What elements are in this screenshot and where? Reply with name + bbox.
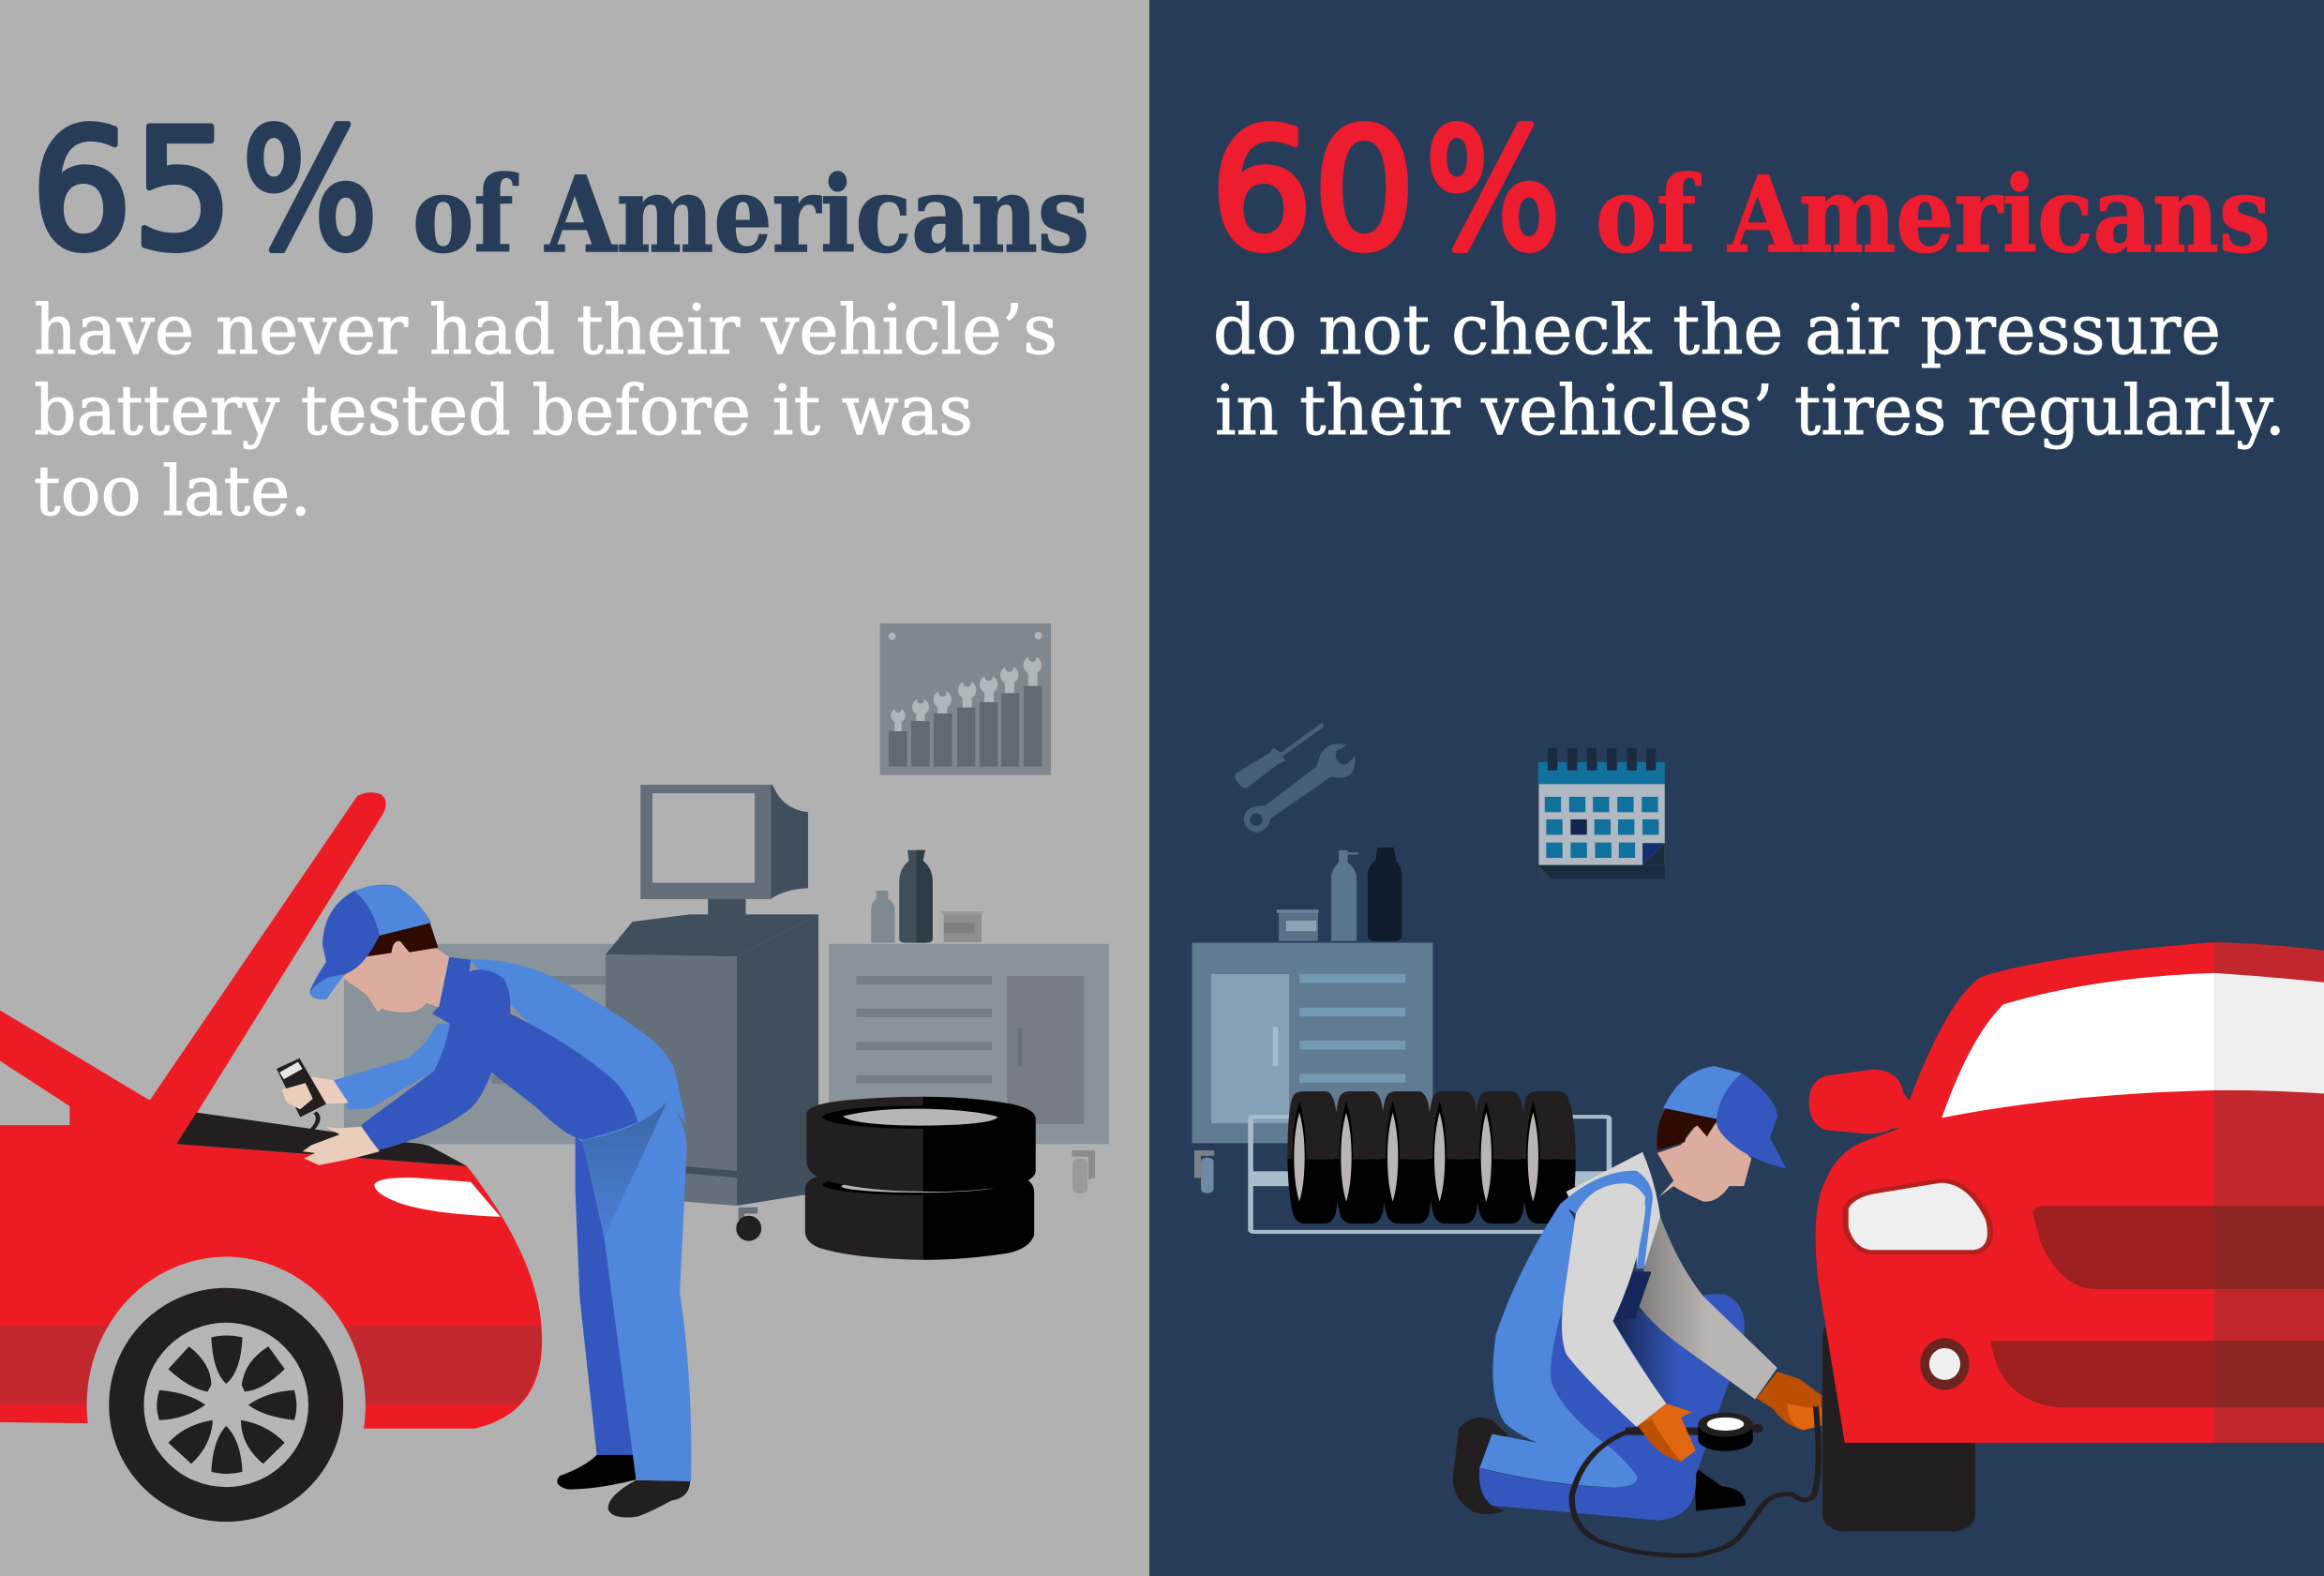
scene: car and kneeling mechanic bbox=[1453, 942, 2324, 1555]
monitor bbox=[640, 785, 808, 920]
right cabinet bbox=[829, 944, 1109, 1193]
panel: battery statistic bbox=[0, 0, 1149, 1576]
text: tire pressure description bbox=[1213, 291, 2286, 451]
text: battery description bbox=[34, 291, 1057, 532]
mechanic leaning over engine bbox=[277, 885, 691, 1518]
scene: car mechanic testing battery bbox=[0, 785, 1109, 1555]
heading: 65% of Americans bbox=[31, 94, 1089, 287]
icon: screwdriver and wrench bbox=[1235, 724, 1356, 833]
heading: 65% of Americans: of Americans bbox=[412, 155, 1089, 277]
left cabinet bbox=[344, 944, 640, 1144]
red car with open hood bbox=[0, 792, 542, 1555]
heading: 65% of Americans: 65 bbox=[31, 94, 233, 287]
mechanic kneeling at tire bbox=[1453, 1066, 1822, 1555]
heading: 60% of Americans bbox=[1210, 94, 2271, 287]
cabinet bbox=[1192, 943, 1432, 1193]
tire rack bbox=[1251, 1117, 1609, 1232]
red car front bbox=[1809, 942, 2324, 1531]
text: tire pressure description: do not check the air pressure bbox=[1213, 291, 2221, 370]
heading: 65% of Americans: % bbox=[242, 94, 378, 287]
bottles and can bbox=[871, 850, 983, 943]
panel: tire pressure statistic bbox=[1149, 0, 2324, 1576]
heading: 60% of Americans: 60 bbox=[1210, 94, 1416, 287]
text: tire pressure description: in their vehicles’ tires regularly. bbox=[1215, 371, 2286, 451]
diagnostic cart bbox=[606, 914, 818, 1241]
scene: garage background bbox=[1192, 748, 1665, 1232]
text: battery description: too late. bbox=[34, 452, 311, 532]
bottles and can bbox=[1277, 848, 1402, 941]
icon: calendar bbox=[1538, 748, 1665, 878]
heading: 60% of Americans: % bbox=[1425, 94, 1561, 287]
six tires on rack bbox=[1287, 1091, 1576, 1223]
text: battery description: battery tested before it was bbox=[34, 371, 973, 451]
text: battery description: have never had their vehicle’s bbox=[34, 291, 1057, 370]
icon: wrench board bbox=[880, 623, 1051, 775]
stacked tires bbox=[805, 1097, 1036, 1260]
car wheel bbox=[109, 1288, 343, 1522]
